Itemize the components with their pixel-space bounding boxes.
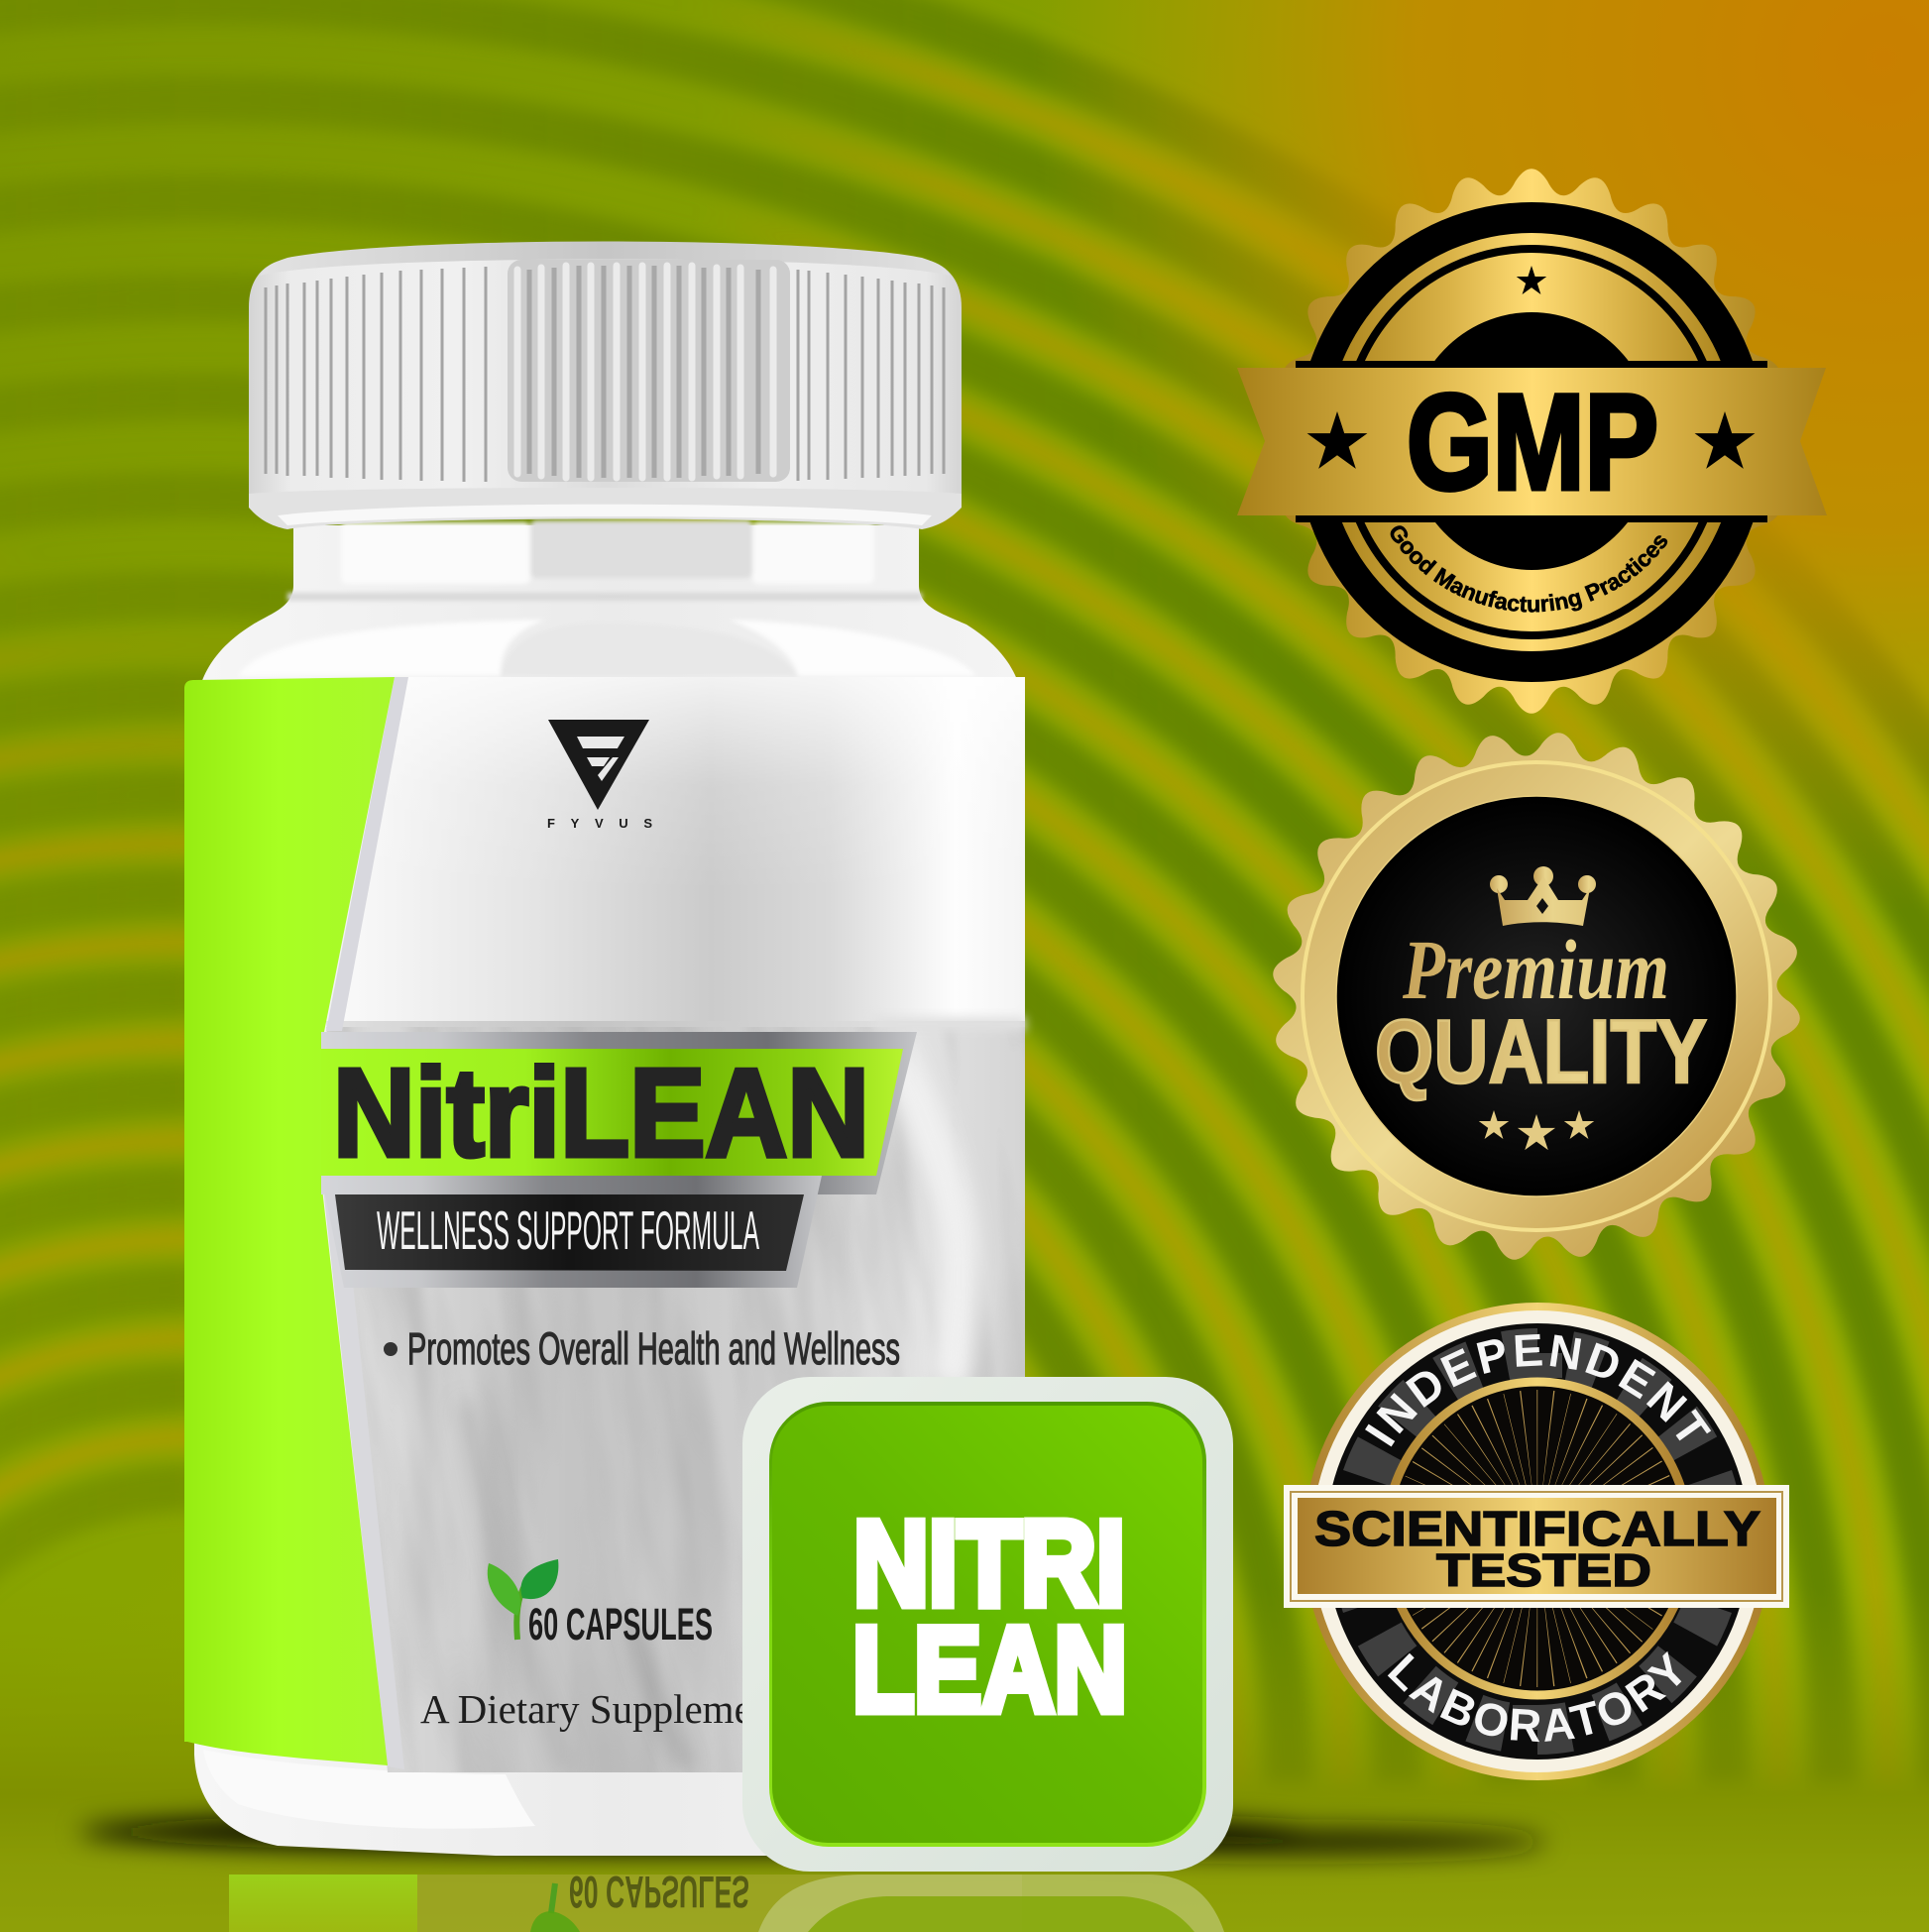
cap lip xyxy=(249,488,962,529)
inner sunburst xyxy=(1386,1382,1689,1695)
cap ribs xyxy=(266,267,944,482)
badge: scientifically tested xyxy=(1284,1303,1789,1780)
three stars xyxy=(1479,1110,1594,1150)
subtitle box xyxy=(335,1194,804,1271)
white base highlight xyxy=(203,1750,535,1829)
banner xyxy=(1284,1485,1789,1608)
bottle xyxy=(184,242,1166,1885)
benefit bullet: Promotes Overall Health and Wellness xyxy=(407,1323,900,1374)
floor reflection of bottle and square xyxy=(229,1867,1224,1932)
badge: GMP xyxy=(1237,169,1827,714)
ribbon xyxy=(1237,368,1827,515)
ring text xyxy=(1365,1334,1711,1743)
icon: green leaves xyxy=(488,1559,558,1640)
capsule count: 60 CAPSULES xyxy=(528,1599,713,1649)
screw cap xyxy=(249,242,962,529)
ring text: INDEPENDENT xyxy=(1365,1334,1711,1447)
premium script: Premium xyxy=(1402,922,1669,1017)
badge: scientifically tested: TESTED xyxy=(1436,1544,1651,1596)
silver band above name xyxy=(321,1032,917,1194)
ring text: LABORATORY xyxy=(1388,1651,1681,1743)
badge: premium quality xyxy=(1250,710,1823,1283)
silver frame of subtitle xyxy=(321,1176,822,1288)
lime name band xyxy=(321,1049,903,1176)
scalloped gold seal xyxy=(1250,710,1823,1283)
square text: NITRI xyxy=(853,1496,1125,1631)
neck highlights xyxy=(287,520,922,601)
curved caption: Good Manufacturing Practices xyxy=(1390,525,1667,613)
brand logo: FYVUS xyxy=(547,816,652,831)
dark ring segments xyxy=(1356,1353,1719,1730)
label panel: white upper xyxy=(326,677,1025,1036)
ribbon and top stars xyxy=(1307,266,1755,469)
benefit bullet xyxy=(384,1323,900,1374)
floor shadow xyxy=(73,1799,1551,1875)
dietary supplement line: A Dietary Supplement xyxy=(420,1686,784,1732)
square NITRI LEAN icon: LEAN xyxy=(852,1602,1127,1737)
brand logo xyxy=(547,720,652,831)
bottle body and shoulders xyxy=(194,525,1025,1856)
GMP text: GMP xyxy=(1407,367,1658,518)
icon: crown xyxy=(1490,866,1596,926)
label panel: grey marble xyxy=(326,1010,1033,1772)
label panel: lime side stripe xyxy=(184,677,408,1769)
scalloped gold seal xyxy=(1275,169,1788,714)
square NITRI LEAN icon xyxy=(742,1377,1233,1872)
product name: NitriLEAN xyxy=(333,1043,869,1183)
mirrored capsules text: 60 CAPSULES xyxy=(569,1867,749,1917)
banner text: SCIENTIFICALLY xyxy=(1314,1503,1760,1556)
quality text: QUALITY xyxy=(1375,1002,1707,1102)
bottle: WELLNESS SUPPORT FORMULA xyxy=(377,1199,759,1261)
shoulder highlights xyxy=(238,620,976,676)
